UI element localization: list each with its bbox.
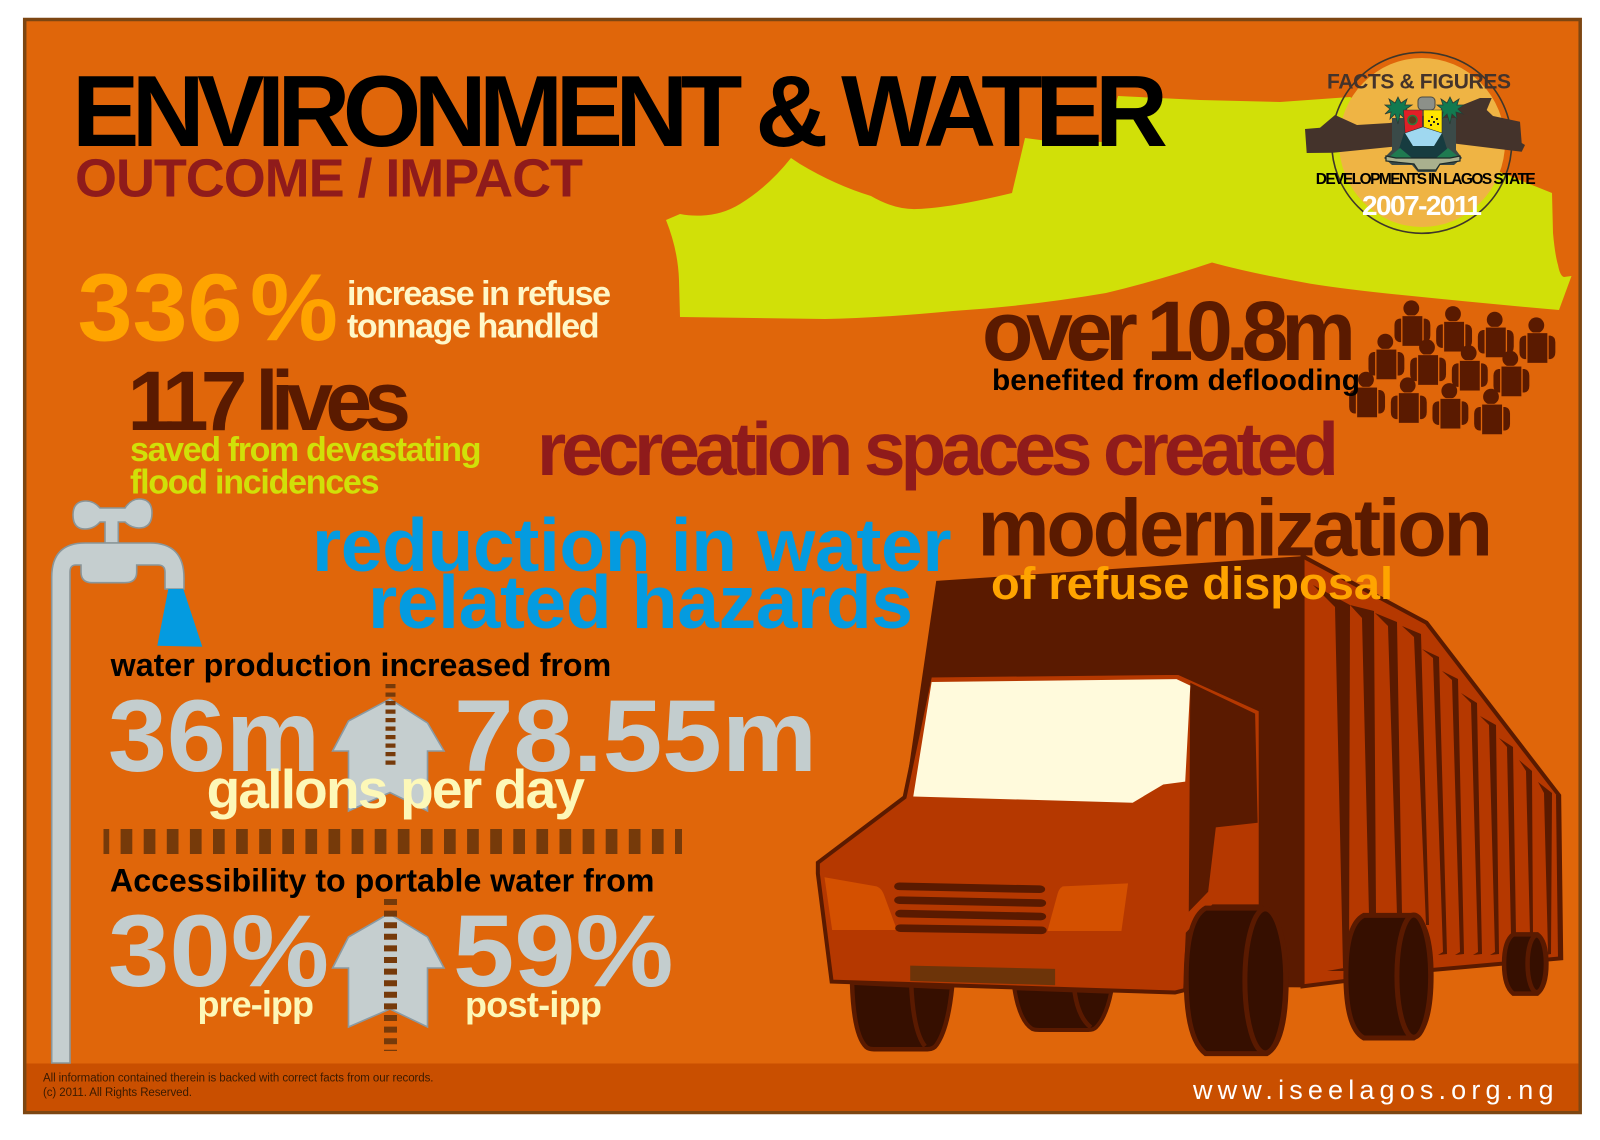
hazards line 2: related hazards bbox=[368, 560, 913, 644]
sky panel bbox=[1405, 127, 1442, 146]
emblem subheading: DEVELOPMENTS IN LAGOS STATE bbox=[1316, 171, 1536, 188]
emblem disc bbox=[1339, 58, 1505, 227]
subtitle: OUTCOME / IMPACT bbox=[75, 148, 583, 208]
far front tyre bbox=[1014, 988, 1111, 1030]
green mound left bbox=[1388, 148, 1412, 158]
emblem: facts and figures seal bbox=[1305, 52, 1536, 233]
base mass bbox=[1398, 133, 1448, 158]
production heading: water production increased from bbox=[110, 647, 611, 683]
truck illustration bbox=[818, 556, 1562, 1054]
unit label: gallons per day bbox=[207, 758, 585, 820]
number plate bbox=[910, 966, 1055, 985]
right headlight bbox=[1047, 883, 1128, 931]
big front wheel bbox=[1186, 908, 1286, 1054]
tap pipe bbox=[52, 543, 184, 1063]
label post-ipp: post-ipp bbox=[465, 984, 602, 1025]
hazards line 1: reduction in water bbox=[312, 503, 952, 587]
near front tyre bbox=[852, 983, 952, 1049]
footer band bbox=[26, 1064, 1578, 1111]
label pre-ipp: pre-ipp bbox=[198, 984, 314, 1024]
figure 30 percent: 30% bbox=[108, 894, 329, 1008]
section: water accessibility bbox=[108, 862, 674, 1051]
arrow up: accessibility bbox=[333, 899, 444, 1051]
caption: refuse disposal: of refuse disposal bbox=[991, 558, 1393, 609]
green mound right bbox=[1436, 148, 1460, 158]
middle wheel bbox=[1346, 915, 1431, 1038]
stat: deflooding bbox=[982, 284, 1360, 397]
number 336: 336 bbox=[78, 254, 242, 362]
coat of arms bbox=[1384, 97, 1464, 172]
icon: water tap bbox=[52, 499, 202, 1063]
flowers in yellow field bbox=[1428, 116, 1439, 126]
red field bbox=[1404, 110, 1422, 133]
map of Lagos: green land shape bbox=[666, 96, 1572, 319]
heading: modernization: modernization bbox=[978, 484, 1493, 574]
dashed divider bbox=[104, 829, 682, 854]
trailer side bbox=[1303, 556, 1561, 986]
dark cab and box front bbox=[905, 556, 1304, 987]
palm crowns bbox=[1385, 97, 1412, 124]
percent sign: % bbox=[250, 254, 338, 362]
lives caption line 2: flood incidences bbox=[130, 464, 380, 502]
footer disclaimer: All information contained therein is backed with correct facts from our records. bbox=[43, 1072, 434, 1084]
water stream bbox=[157, 589, 202, 647]
grille bars bbox=[899, 886, 1041, 930]
lives caption line 1: saved from devastating bbox=[130, 431, 482, 469]
people group icons bbox=[1349, 300, 1556, 435]
ring in red field bbox=[1408, 116, 1417, 124]
small rear wheel bbox=[1504, 934, 1546, 994]
cab body bbox=[818, 673, 1261, 993]
stat: refuse tonnage bbox=[78, 254, 611, 362]
footer disclaimer bbox=[43, 1072, 434, 1099]
footer disclaimer: (c) 2011. All Rights Reserved. bbox=[43, 1087, 192, 1099]
left headlight bbox=[824, 877, 897, 930]
tap handle bbox=[73, 499, 152, 543]
refuse caption line 1: increase in refuse bbox=[347, 275, 611, 313]
figure 36m: 36m bbox=[108, 679, 320, 793]
motto ribbon bbox=[1386, 156, 1460, 170]
number of lives: 117 lives bbox=[128, 354, 411, 448]
emblem ring bbox=[1332, 52, 1512, 233]
website url: www.iseelagos.org.ng bbox=[1192, 1075, 1554, 1105]
map silhouette bbox=[1305, 98, 1525, 153]
figure 78.55m: 78.55m bbox=[454, 679, 817, 793]
side window bbox=[1189, 683, 1258, 912]
emblem heading: FACTS & FIGURES bbox=[1327, 70, 1511, 93]
refuse caption line 2: tonnage handled bbox=[347, 308, 600, 346]
heading: recreation spaces: recreation spaces created bbox=[537, 407, 1339, 491]
rear axle tyres behind cab bbox=[852, 556, 1561, 1049]
trailer ribs bbox=[1313, 585, 1562, 971]
deflooding caption: benefited from deflooding bbox=[992, 364, 1360, 397]
figure 59 percent: 59% bbox=[453, 894, 674, 1008]
emblem years: 2007-2011 bbox=[1362, 190, 1482, 221]
deflooding figure: over 10.8m bbox=[982, 284, 1356, 378]
crest helmet bbox=[1418, 97, 1435, 110]
accessibility heading: Accessibility to portable water from bbox=[110, 862, 654, 898]
heading: water hazards bbox=[312, 503, 952, 644]
arrow up: production bbox=[333, 684, 444, 811]
title: ENVIRONMENT & WATER bbox=[72, 56, 1168, 168]
section: water production bbox=[108, 647, 817, 820]
crest backing bbox=[1384, 118, 1462, 172]
windshield bbox=[913, 679, 1190, 803]
yellow field bbox=[1424, 110, 1442, 133]
stat: lives saved bbox=[128, 354, 482, 502]
